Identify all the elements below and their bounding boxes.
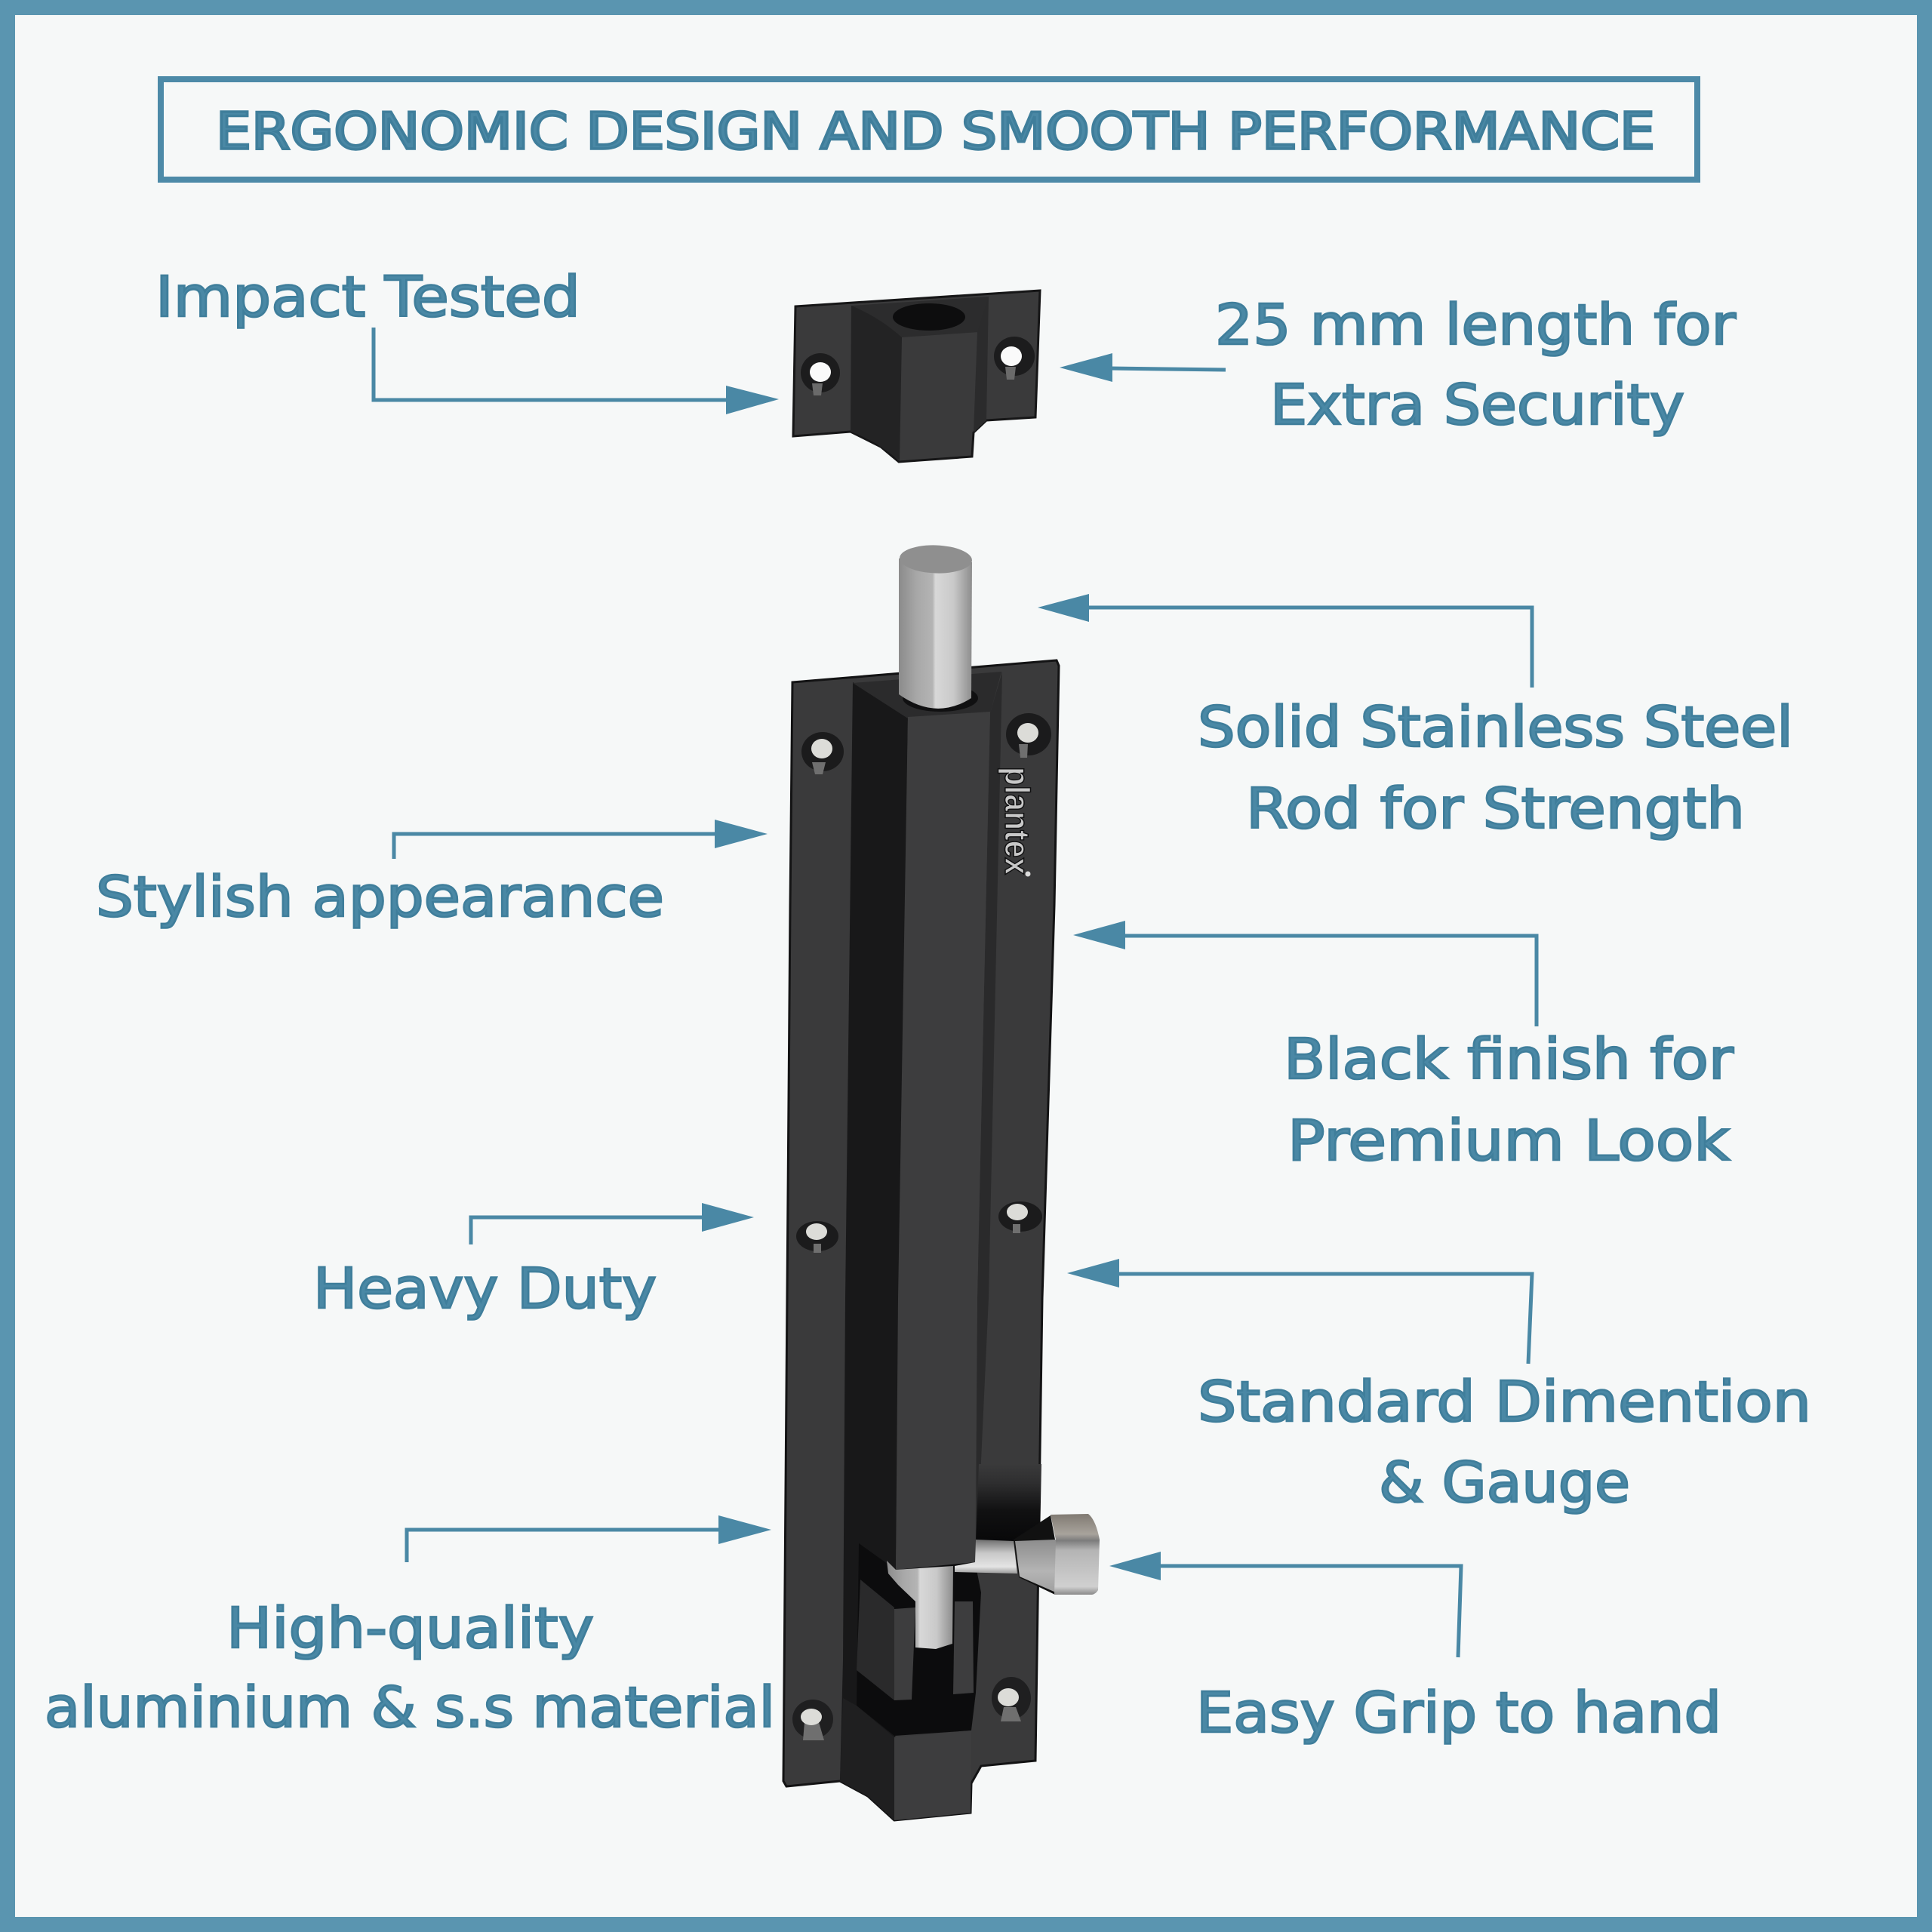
bolt front face [896, 712, 990, 1570]
callout: Impact Tested [155, 265, 779, 414]
bottom guide block [894, 1730, 971, 1820]
callout: High-quality aluminium: High-quality [226, 1596, 594, 1661]
callout: 25 mm length: Extra Security [1270, 373, 1684, 438]
handle knob [1014, 1514, 1100, 1595]
callout: Heavy Duty [313, 1203, 754, 1321]
callout: High-quality aluminium [45, 1515, 775, 1740]
rod socket [903, 685, 978, 712]
callout: Standard Dimention: & Gauge [1379, 1451, 1630, 1515]
bolt base plate [783, 660, 1059, 1820]
callout: Black finish [1073, 921, 1734, 1174]
callout: Solid Stainless Steel: Solid Stainless Steel [1198, 695, 1793, 760]
screw holes [792, 713, 1051, 1740]
callout: Easy Grip: Easy Grip to hand [1196, 1681, 1721, 1746]
callout: Black finish: Black finish for [1284, 1027, 1734, 1092]
callout: Standard Dimention: Standard Dimention [1198, 1370, 1811, 1435]
callout: Heavy Duty: Heavy Duty [313, 1257, 657, 1321]
callout: Stylish appearance: Stylish appearance [96, 865, 664, 930]
handle stem [955, 1540, 1017, 1574]
callout: Solid Stainless Steel: Rod for Strength [1246, 777, 1745, 841]
callout: Standard Dimention [1067, 1259, 1811, 1515]
bolt housing top [853, 672, 1001, 718]
bolt dark left face [840, 682, 908, 1820]
callout: High-quality aluminium: aluminium & s.s material [45, 1675, 775, 1740]
callout: Easy Grip [1109, 1552, 1721, 1746]
callout: Solid Stainless Steel [1038, 594, 1793, 841]
bolt right groove [976, 672, 1002, 1540]
callout: Impact Tested: Impact Tested [155, 265, 580, 330]
strike plate product image [793, 291, 1040, 462]
knob shadow [976, 1464, 1041, 1541]
slot cavity [857, 1543, 981, 1736]
callout: Stylish appearance [96, 820, 768, 930]
stainless steel rod [899, 544, 973, 709]
title [161, 79, 1697, 180]
tower bolt product image [783, 544, 1100, 1820]
slot left block [857, 1580, 894, 1700]
callout: 25 mm length: 25 mm length for [1215, 293, 1737, 358]
lower rod [887, 1561, 953, 1649]
title: ERGONOMIC DESIGN AND SMOOTH PERFORMANCE [216, 102, 1655, 161]
callout: 25 mm length [1060, 293, 1737, 438]
callout: Black finish: Premium Look [1287, 1109, 1730, 1174]
plantex logo: plantex [998, 767, 1037, 875]
slot right block [953, 1601, 974, 1694]
